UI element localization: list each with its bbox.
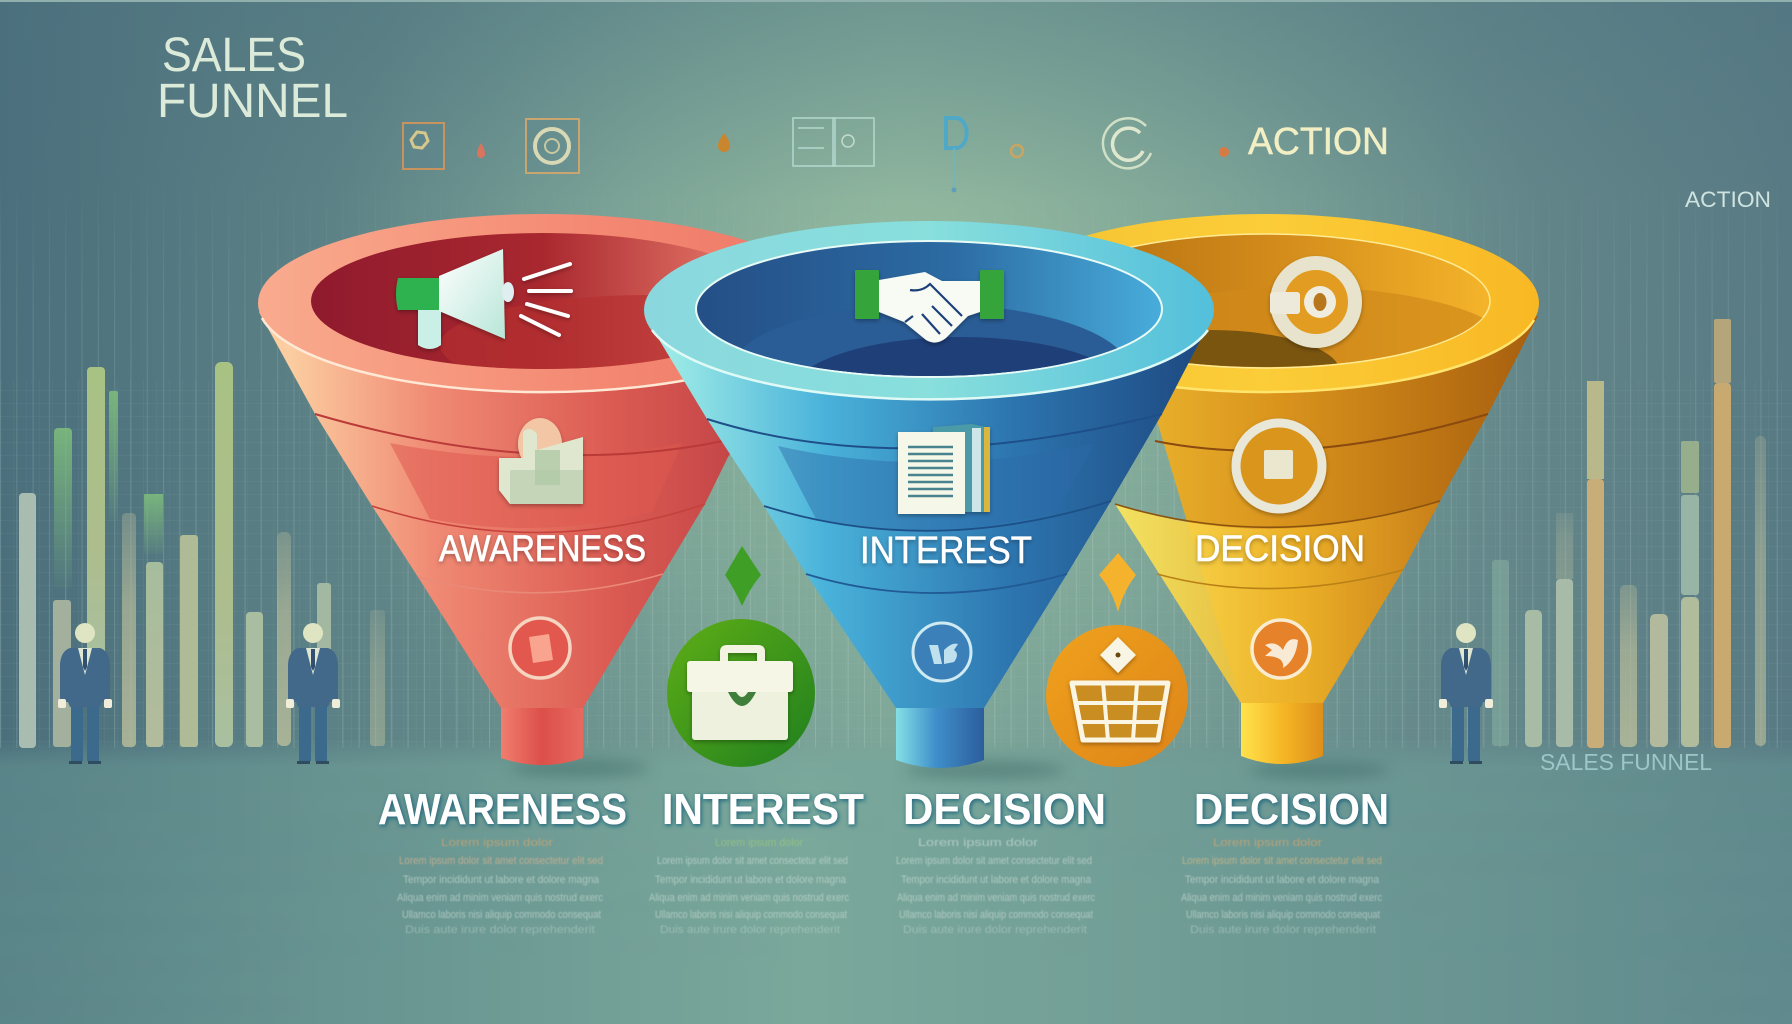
title: SALES [162, 29, 306, 82]
funnel rim [258, 214, 828, 392]
text block: decision: Aliqua enim ad minim veniam quis nostrud exerc [897, 892, 1095, 904]
text block: interest [649, 837, 849, 936]
text block: decision 2 [1181, 837, 1382, 936]
text block: decision: Lorem ipsum dolor [918, 837, 1038, 849]
figure: businessman left [58, 623, 112, 764]
funnel opening [1040, 234, 1490, 368]
label: ACTION heading: ACTION [1248, 121, 1389, 163]
funnel spout [501, 700, 583, 765]
arrow: green diamond [725, 546, 761, 606]
label: SALES FUNNEL caption: SALES FUNNEL [1540, 749, 1712, 775]
text block: decision 2: Ullamco laboris nisi aliquip commodo consequat [1186, 909, 1380, 921]
bar chart: left [19, 362, 385, 748]
label: interest on funnel: INTEREST [860, 530, 1032, 572]
text block: decision: Lorem ipsum dolor sit amet consectetur elit sed [896, 855, 1092, 867]
text block: interest: Lorem ipsum dolor [715, 837, 803, 849]
icon: badge [913, 623, 971, 681]
text block: interest: Lorem ipsum dolor sit amet consectetur elit sed [657, 855, 848, 867]
funnel rim [991, 214, 1539, 392]
top icon row [403, 118, 1229, 192]
funnel cone [646, 318, 1212, 708]
label: ACTION side: ACTION [1685, 187, 1771, 212]
bar chart: right [1492, 319, 1766, 748]
label: decision on funnel: DECISION [1195, 528, 1365, 569]
icon: green briefcase circle [667, 619, 815, 767]
icon: ring with square [1236, 423, 1322, 509]
text block: decision: Ullamco laboris nisi aliquip commodo consequat [899, 909, 1093, 921]
funnel spout [1241, 698, 1323, 764]
text block: decision: Tempor incididunt ut labore et dolore magna [901, 874, 1092, 886]
text block: awareness: Ullamco laboris nisi aliquip commodo consequat [402, 909, 601, 921]
text block: interest: Ullamco laboris nisi aliquip commodo consequat [655, 909, 847, 921]
icon: target gear [1270, 263, 1355, 341]
icon: handshake [855, 270, 1004, 343]
text block: interest: Aliqua enim ad minim veniam quis nostrud exerc [649, 892, 849, 904]
text block: decision: Duis aute irure dolor reprehenderit [903, 924, 1087, 936]
text block: decision 2: Aliqua enim ad minim veniam quis nostrud exerc [1181, 892, 1382, 904]
text block: decision 2: Duis aute irure dolor reprehenderit [1190, 924, 1376, 936]
funnel rim [644, 221, 1214, 399]
funnel: interest (blue) [644, 221, 1214, 768]
icon: document and book [898, 424, 990, 514]
funnel: awareness (red) [258, 214, 748, 765]
text block: decision 2: Lorem ipsum dolor sit amet consectetur elit sed [1182, 855, 1382, 867]
icon: orange basket circle [1046, 625, 1188, 767]
funnel cone [259, 312, 830, 708]
text block: awareness: Duis aute irure dolor reprehenderit [405, 924, 595, 936]
text block: awareness: Lorem ipsum dolor [441, 837, 553, 849]
funnel opening [311, 233, 775, 369]
text block: interest: Duis aute irure dolor reprehenderit [660, 924, 840, 936]
label: decision: DECISION [903, 785, 1106, 834]
text block: decision [896, 837, 1095, 936]
funnel opening [696, 241, 1162, 377]
text block: awareness: Aliqua enim ad minim veniam quis nostrud exerc [397, 892, 603, 904]
funnel cone [1130, 316, 1538, 703]
arrow: yellow diamond [1099, 553, 1136, 612]
funnel: decision (yellow) [1086, 214, 1539, 764]
icon: badge [1252, 620, 1310, 678]
text block: awareness: Lorem ipsum dolor sit amet consectetur elit sed [399, 855, 603, 867]
label: awareness on funnel: AWARENESS [439, 528, 646, 569]
title: FUNNEL [157, 75, 348, 128]
funnel shadows [510, 759, 1390, 779]
icon: badge [510, 618, 570, 678]
text block: awareness: Tempor incididunt ut labore et dolore magna [403, 874, 600, 886]
icon: megaphone [396, 249, 571, 349]
text block: decision 2: Tempor incididunt ut labore et dolore magna [1185, 874, 1380, 886]
title [157, 29, 348, 128]
label: decision 2: DECISION [1194, 785, 1389, 834]
icon: bag [499, 418, 583, 504]
text block: awareness [397, 837, 603, 936]
funnel spout [896, 700, 984, 768]
text block: interest: Tempor incididunt ut labore et dolore magna [655, 874, 847, 886]
figure: businessman centre-left [286, 623, 340, 764]
figure: businessman right [1439, 623, 1493, 764]
label: interest: INTEREST [662, 785, 864, 834]
label: awareness: AWARENESS [378, 785, 627, 834]
text block: decision 2: Lorem ipsum dolor [1213, 837, 1322, 849]
